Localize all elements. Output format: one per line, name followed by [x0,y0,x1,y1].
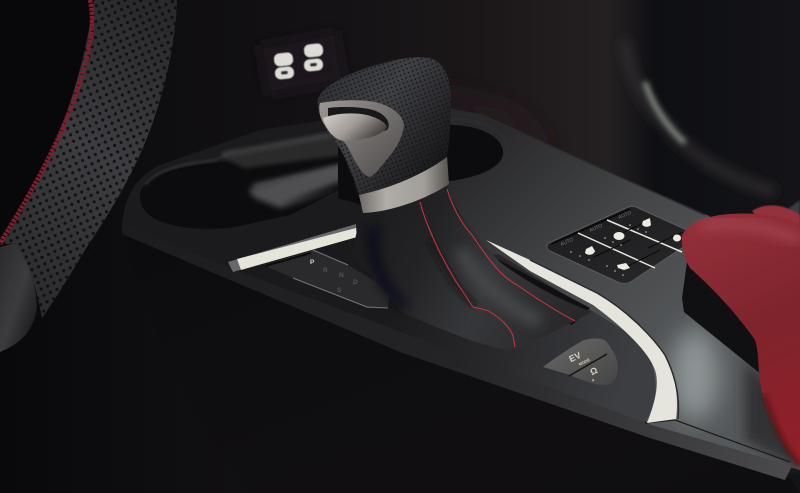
red stitching [420,189,575,347]
right cup holder [440,125,503,182]
switch labels: AUTO [588,223,604,234]
steering spoke [0,243,37,352]
gear shift boot [352,186,592,350]
shift position letters: R [323,267,328,274]
shift knob [318,57,451,195]
shift indicator plate [263,250,390,308]
armrest rear cushion [752,205,800,232]
left cup holder [140,140,360,229]
icon: switch symbols [585,218,681,270]
button labels: EV [567,350,583,364]
shift position letters: P [310,259,315,266]
white trim strip left [228,224,357,272]
seat heater switch panel [547,206,700,284]
metal collar [359,156,449,213]
inner dark panel [238,235,656,423]
button labels: 4 [591,377,596,383]
knob release button [323,113,387,141]
switch labels [559,210,633,248]
shift position letters: N [339,272,344,279]
console top surface [122,102,800,470]
red steering stitching [0,0,92,243]
button labels [567,350,599,383]
blurred console tray highlights [220,132,345,168]
shift position letters: D [353,279,358,286]
white trim strip right [486,240,678,423]
EV and drive mode buttons [543,338,618,385]
icon: lit socket symbols [273,43,324,80]
shift position letters [310,259,358,294]
port panel with two lit sockets [258,31,346,96]
button labels: Ω [588,365,599,377]
switch indicator dots [570,224,647,276]
button labels: MODE [578,357,591,367]
shift position letters: S [337,287,342,294]
knob chrome surround [319,100,404,177]
switch labels: AUTO [617,210,633,221]
recess beside boot [490,255,590,325]
switch labels: AUTO [559,237,575,248]
steering wheel [0,0,177,352]
console front face and lip [122,224,800,493]
armrest black base [682,262,762,375]
red armrest [682,205,800,466]
reflected light on console surface [671,329,719,421]
light streak on door panel [625,40,775,192]
cup holders [140,120,508,229]
